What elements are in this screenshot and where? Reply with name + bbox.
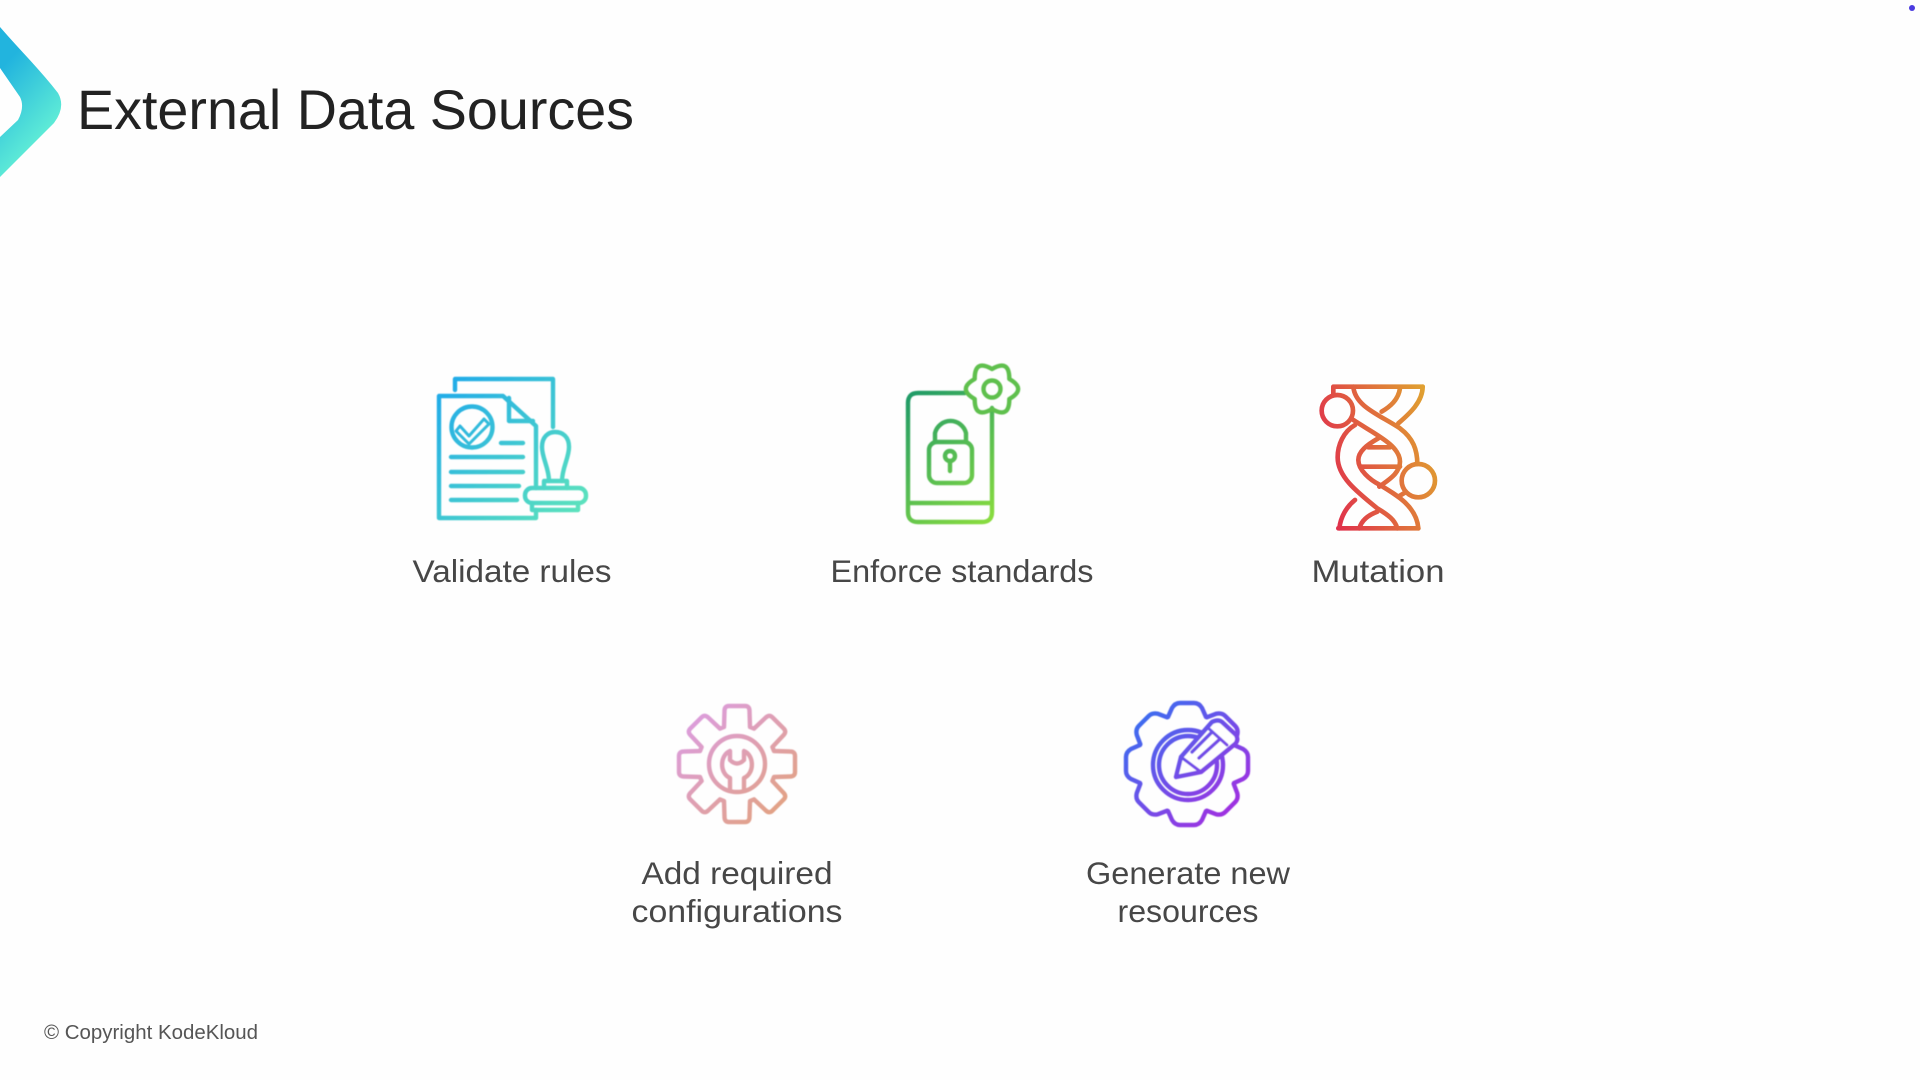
- icon: gear with wrench: [679, 706, 795, 822]
- icon: document with stamp: [439, 379, 586, 518]
- label: generate new resources: resources: [1118, 893, 1258, 929]
- icon: phone with lock and gear: [908, 366, 1018, 522]
- logo chevron: [0, 27, 61, 177]
- label: generate new resources: Generate new: [1086, 855, 1290, 891]
- icon: gear with pencil: [1126, 703, 1248, 825]
- item: mutation: [1312, 387, 1444, 589]
- dot marker: [1909, 5, 1915, 11]
- icon: DNA helix: [1322, 387, 1435, 528]
- label: validate rules: Validate rules: [412, 553, 612, 589]
- item: validate rules: [412, 379, 612, 589]
- label: add required configurations: configurations: [632, 893, 842, 929]
- label: generate new resources: [1086, 855, 1290, 929]
- label: enforce standards: Enforce standards: [830, 553, 1094, 589]
- label: add required configurations: [632, 855, 842, 929]
- label: add required configurations: Add required: [642, 855, 832, 891]
- label: mutation: Mutation: [1312, 553, 1444, 589]
- item: generate new resources: [1086, 703, 1290, 929]
- title: External Data Sources: [77, 78, 634, 141]
- item: add required configurations: [632, 706, 842, 929]
- item: enforce standards: [830, 366, 1094, 589]
- footer copyright: © Copyright KodeKloud: [44, 1022, 258, 1044]
